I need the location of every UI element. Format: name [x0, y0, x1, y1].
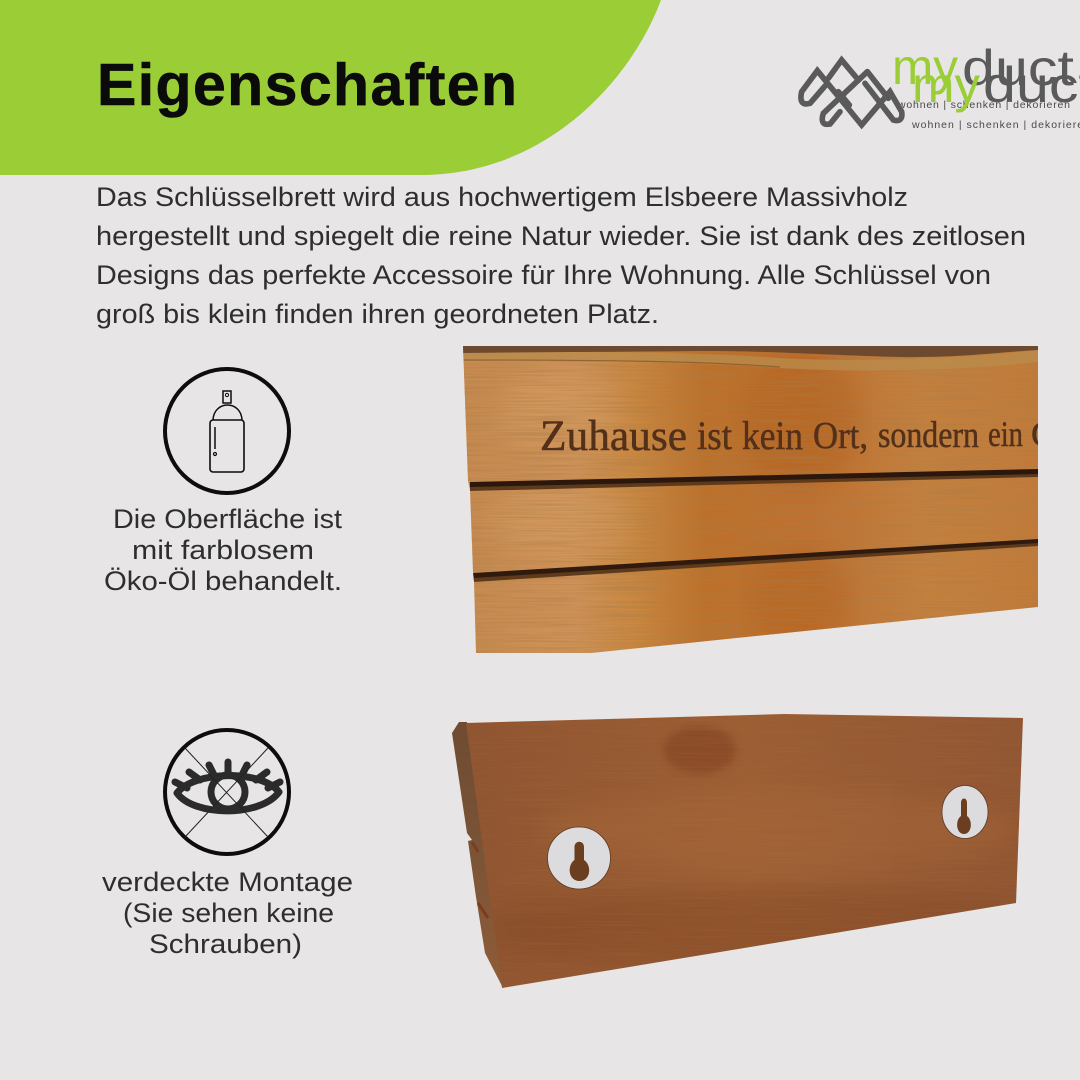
- intro text: hergestellt und spiegelt die reine Natur wieder. Sie ist dank des zeitlosen: [96, 221, 1026, 251]
- label: surface: [104, 504, 343, 596]
- engraved wood text: sondern: [878, 415, 979, 456]
- logo: [801, 39, 1080, 131]
- label: surface: Die Oberfläche ist: [113, 504, 343, 534]
- label: surface: mit farblosem: [132, 535, 314, 565]
- logo wordmark: lower: [912, 57, 1080, 113]
- green header shape: [0, 0, 661, 175]
- label: hidden mounting: [102, 867, 353, 959]
- logo wordmark: upper: duct: [962, 40, 1074, 96]
- title: Eigenschaften: [97, 52, 517, 118]
- label: surface: Öko-Öl behandelt.: [104, 566, 342, 596]
- icon: spray can: [165, 369, 289, 493]
- engraved wood text: ein: [988, 414, 1023, 454]
- label: hidden mounting: Schrauben): [149, 929, 302, 959]
- intro text: Das Schlüsselbrett wird aus hochwertigem Elsbeere Massivholz: [96, 182, 908, 212]
- label: hidden mounting: verdeckte Montage: [102, 867, 353, 897]
- photo: engraved front of key board: [460, 344, 1057, 656]
- logo text: first tagline: wohnen | schenken | dekorieren: [897, 99, 1070, 111]
- side slots: [472, 842, 488, 918]
- intro text: [96, 182, 1026, 329]
- engraved wood text: ist: [697, 413, 732, 458]
- engraved wood text: kein: [742, 413, 803, 458]
- icon: hidden eye: [165, 730, 289, 854]
- engraved wood text: Zuhause: [540, 413, 687, 460]
- engraved wood text: Ort,: [813, 415, 868, 457]
- logo wordmark: upper: [892, 39, 1074, 96]
- intro text: Designs das perfekte Accessoire für Ihre Wohnung. Alle Schlüssel von: [96, 260, 991, 290]
- board side edge: [452, 722, 503, 988]
- label: hidden mounting: (Sie sehen keine: [123, 898, 334, 928]
- logo mark: mountains: [801, 60, 902, 125]
- left keyhole plate: [548, 827, 610, 889]
- engraved wood text: [542, 420, 1038, 454]
- logo wordmark: lower: duct: [983, 57, 1080, 113]
- right keyhole plate: [942, 786, 988, 838]
- logo wordmark: lower: my: [912, 57, 980, 113]
- engraved wood text: G: [1031, 414, 1057, 454]
- photo: back of key board: [452, 714, 1023, 988]
- logo wordmark: upper: my: [892, 39, 958, 95]
- intro text: groß bis klein finden ihren geordneten Platz.: [96, 299, 659, 329]
